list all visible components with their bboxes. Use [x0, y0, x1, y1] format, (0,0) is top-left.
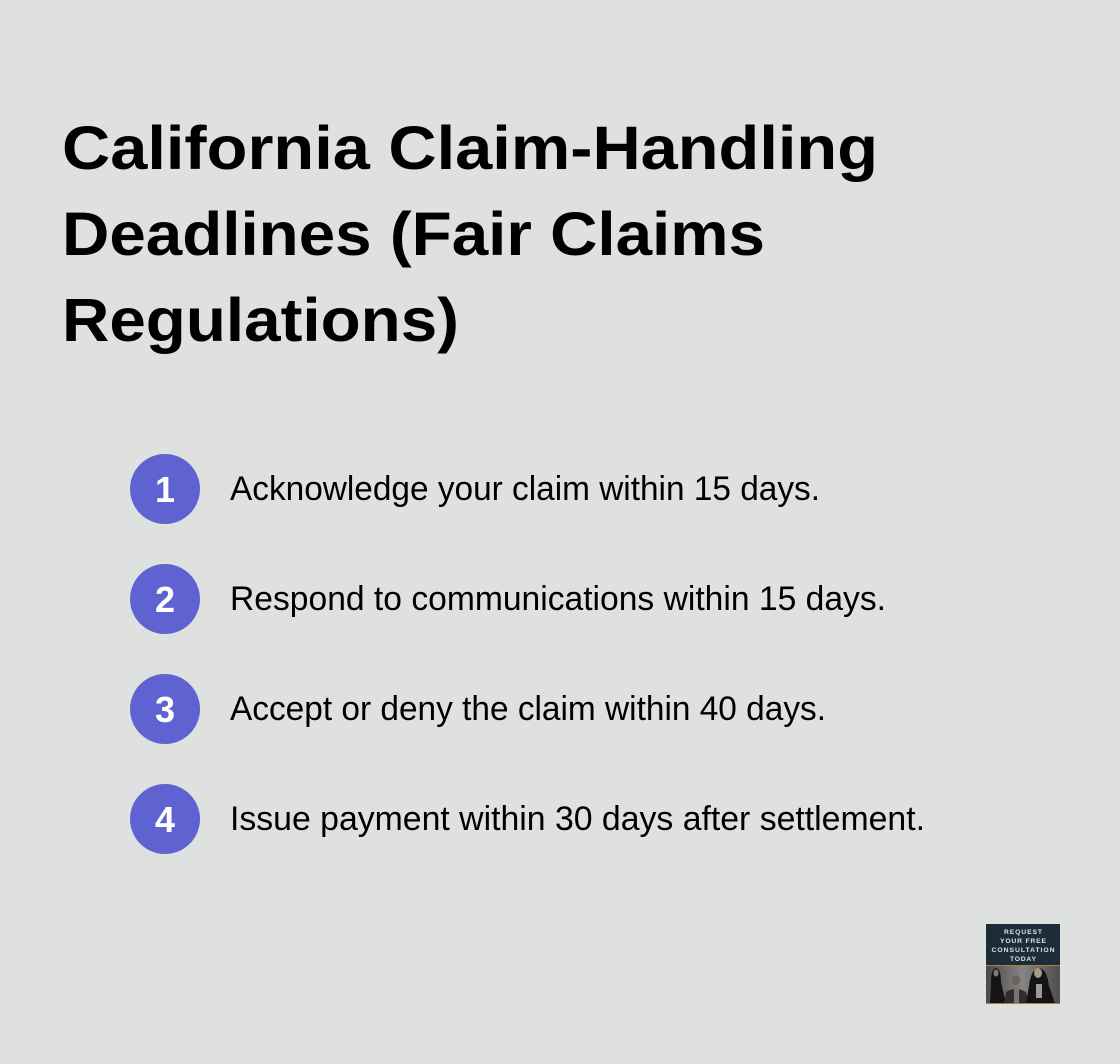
- title: California Claim-Handling: [62, 114, 878, 182]
- title: Deadlines (Fair Claims: [62, 200, 765, 268]
- step 3 text: Accept or deny the claim within 40 days.: [230, 690, 826, 728]
- step 1: [130, 454, 820, 524]
- number badge 1: 1: [155, 469, 175, 510]
- consultation badge: [986, 924, 1060, 1004]
- consultation badge: TODAY: [1010, 956, 1036, 963]
- step 2: [130, 564, 886, 634]
- number badge 2: [130, 564, 200, 634]
- consultation badge: YOUR FREE: [1000, 938, 1046, 945]
- consultation badge: CONSULTATION: [992, 947, 1055, 954]
- step 4 text: Issue payment within 30 days after settlement.: [230, 800, 925, 838]
- number badge 1: [130, 454, 200, 524]
- consultation badge: REQUEST: [1004, 929, 1043, 936]
- photo of three people: [990, 968, 1055, 1003]
- number badge 3: 3: [155, 689, 175, 730]
- number badge 4: 4: [155, 799, 175, 840]
- step 4: [130, 784, 925, 854]
- number badge 4: [130, 784, 200, 854]
- title: [62, 114, 878, 354]
- number badge 2: 2: [155, 579, 175, 620]
- step 1 text: Acknowledge your claim within 15 days.: [230, 470, 820, 508]
- number badge 3: [130, 674, 200, 744]
- title: Regulations): [62, 286, 459, 354]
- step 3: [130, 674, 826, 744]
- step 2 text: Respond to communications within 15 days.: [230, 580, 886, 618]
